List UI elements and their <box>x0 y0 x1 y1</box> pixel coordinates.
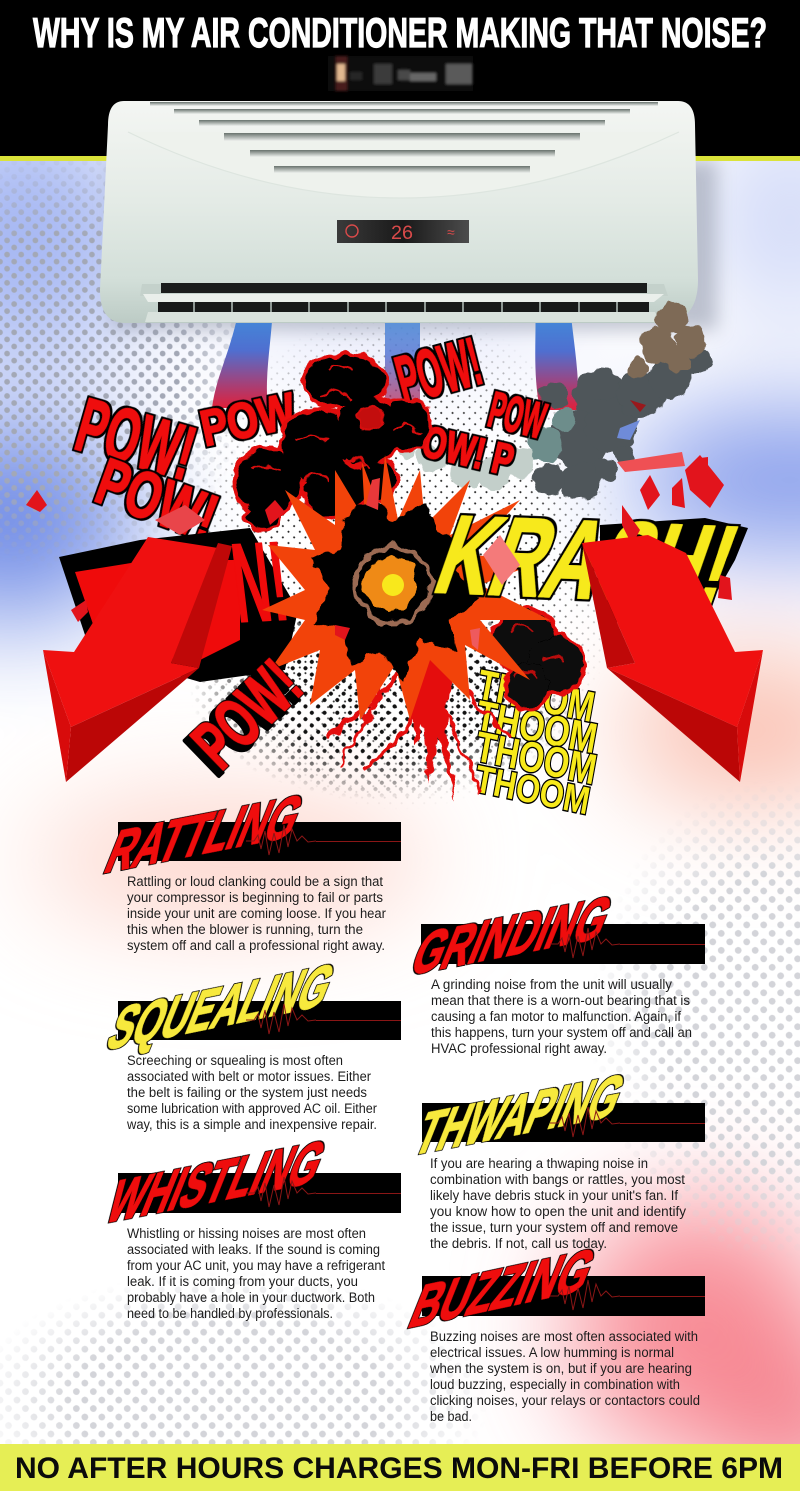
display panel <box>337 220 469 244</box>
air grille <box>140 283 668 322</box>
yellow centre <box>382 574 404 596</box>
comic word: POW top group: OW! P <box>418 417 518 485</box>
black cloud lower right <box>491 606 586 710</box>
body text: mean that there is a worn-out bearing that is <box>431 993 690 1008</box>
section: grinding <box>403 884 705 1056</box>
grey smoke <box>534 345 710 500</box>
comic word: POW top group: POW <box>196 382 301 457</box>
heading bar <box>422 1103 705 1142</box>
waveform <box>550 928 705 958</box>
heading: RATTLING <box>97 783 312 886</box>
body text <box>430 1156 686 1251</box>
heading: THWAPING <box>406 1062 633 1168</box>
orange core <box>362 557 418 612</box>
display panel: 26 <box>391 223 413 244</box>
heading bar <box>118 1001 401 1040</box>
body text: when the system is on, but if you are hearing <box>429 1361 692 1376</box>
footer text: NO AFTER HOURS CHARGES MON-FRI BEFORE 6PM <box>15 1452 783 1485</box>
body text <box>126 1053 378 1132</box>
heading: GRINDING <box>403 884 621 988</box>
comic word: THOOM: THOOM <box>473 692 601 763</box>
heading bar <box>422 1276 705 1316</box>
comic word: POW top group: POW! <box>87 444 227 555</box>
body text: HVAC professional right away. <box>431 1041 607 1056</box>
waveform <box>550 1107 705 1137</box>
comic word: POW top group: POW! <box>388 323 489 418</box>
orange starburst <box>262 455 550 720</box>
waveform <box>246 825 401 855</box>
section: thwaping <box>406 1062 705 1251</box>
heading: SQUEALING <box>99 952 343 1063</box>
vent slots <box>150 102 658 173</box>
body text <box>431 977 692 1056</box>
front panel curve <box>128 132 679 198</box>
body text: associated with leaks. If the sound is coming <box>127 1242 380 1257</box>
footer band <box>0 1444 800 1491</box>
body text: Buzzing noises are most often associated with <box>430 1329 698 1344</box>
heading bar <box>118 1173 401 1213</box>
yellow accent line <box>0 156 800 161</box>
body text: the issue, turn your system off and remove <box>430 1220 678 1235</box>
brown smoke <box>627 302 708 379</box>
body text: some lubrication with approved AC oil. Either <box>127 1101 378 1116</box>
body text: Screeching or squealing is most often <box>127 1053 343 1068</box>
comic word: POW lower: POW! <box>177 645 316 783</box>
body text: way, this is a simple and inexpensive repair. <box>126 1117 377 1132</box>
body text: likely have debris stuck in your unit's fan. If <box>430 1188 678 1203</box>
comic word: THOOM: THOOM <box>472 757 593 823</box>
teal smoke <box>527 408 577 463</box>
section: rattling <box>97 783 401 953</box>
comic word: POW top group: POW <box>483 381 552 449</box>
body text <box>127 874 387 953</box>
air conditioner unit <box>100 101 698 323</box>
comic word: THOOM <box>458 661 611 824</box>
body text: causing a fan motor to malfunction. Again, if <box>431 1009 681 1024</box>
body text: be bad. <box>430 1409 472 1424</box>
body text: leak. If it is coming from your ducts, you <box>127 1274 358 1289</box>
blurred logo <box>328 56 473 91</box>
smoke cloud <box>398 302 710 500</box>
left red arrow <box>43 537 232 782</box>
unit shadow <box>112 160 717 330</box>
waveform <box>246 1004 401 1034</box>
comic word: THOOM: THOOM <box>472 723 600 794</box>
body text: from your AC unit, you may have a refrigerant <box>127 1258 385 1273</box>
body text: the belt is failing or the system just needs <box>127 1085 367 1100</box>
body text: inside your unit are coming loose. If you hear <box>127 906 387 921</box>
waveform <box>246 1177 401 1207</box>
body text: combination with bangs or rattles, you most <box>430 1172 685 1187</box>
body text: the debris. If not, call us today. <box>430 1236 607 1251</box>
explosion <box>262 455 550 800</box>
heading: WHISTLING <box>98 1128 334 1236</box>
display panel: ≈ <box>447 224 455 240</box>
right red arrow <box>582 535 763 782</box>
comic word: THOOM: THOOM <box>474 661 598 731</box>
black cloud fill <box>236 356 429 529</box>
body text: A grinding noise from the unit will usually <box>431 977 672 992</box>
comic word: POW lower: POW! <box>172 651 311 789</box>
body text: clicking noises, your relays or contactors could <box>430 1393 700 1408</box>
body text: this when the blower is running, turn the <box>127 922 363 937</box>
pale smoke <box>398 438 536 492</box>
waveform <box>550 1280 705 1310</box>
body text: If you are hearing a thwaping noise in <box>430 1156 648 1171</box>
body text: system off and call a professional right away. <box>127 938 385 953</box>
body text: your compressor is beginning to fail or parts <box>127 890 383 905</box>
section: whistling <box>98 1128 401 1321</box>
body text: need to be handled by professionals. <box>127 1306 333 1321</box>
body text <box>127 1226 385 1321</box>
body text: Whistling or hissing noises are most often <box>127 1226 366 1241</box>
black cloud upper <box>232 352 433 533</box>
body text <box>429 1329 700 1424</box>
cold air streams <box>212 303 578 420</box>
body text: associated with belt or motor issues. Either <box>127 1069 372 1084</box>
brown ring <box>355 547 431 623</box>
comic word: POW top group <box>67 323 552 555</box>
body text: this happens, turn your system off and call an <box>431 1025 692 1040</box>
debris fragments <box>26 400 732 650</box>
red cloud outline <box>232 352 433 533</box>
section: buzzing <box>401 1236 705 1424</box>
body text: loud buzzing, especially in combination with <box>430 1377 680 1392</box>
comic word: POW top group: POW! <box>67 383 204 497</box>
cloud detail <box>250 366 419 482</box>
section: squealing <box>99 952 401 1132</box>
comic word: large burst behind left arrow <box>59 519 298 682</box>
heading bar <box>421 924 705 964</box>
black core <box>310 500 480 682</box>
body text: you know how to open the unit and identify <box>430 1204 686 1219</box>
red drips <box>330 650 505 800</box>
body text: Rattling or loud clanking could be a sign that <box>127 874 383 889</box>
black header band <box>0 0 800 156</box>
heading: BUZZING <box>401 1236 604 1341</box>
body text: probably have a hole in your ductwork. Both <box>127 1290 375 1305</box>
body text: electrical issues. A low humming is normal <box>430 1345 674 1360</box>
comic word: POW lower <box>172 645 316 789</box>
comic word: large burst behind left arrow: N! <box>226 519 294 646</box>
heading bar <box>118 822 401 861</box>
